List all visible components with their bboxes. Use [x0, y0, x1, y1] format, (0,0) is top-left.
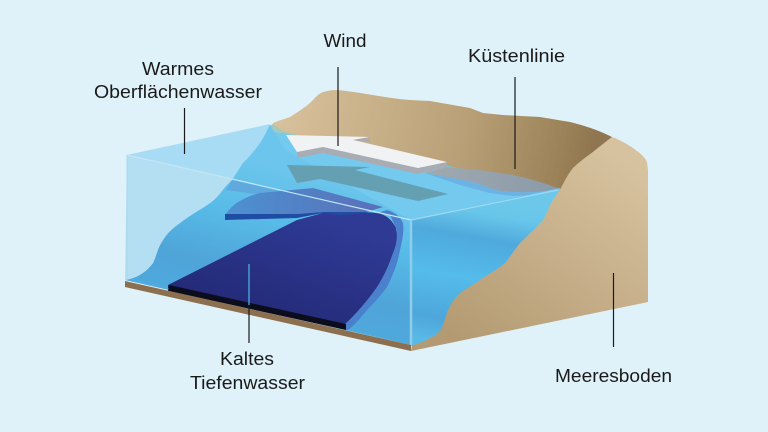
water volume, front right — [411, 188, 580, 346]
label: Wind — [324, 31, 366, 146]
surface front line — [127, 155, 411, 220]
sea surface — [127, 125, 560, 220]
sea floor slab — [125, 281, 411, 351]
leader line — [184, 108, 186, 154]
label text: Warmes — [142, 59, 214, 79]
cold deep water — [168, 188, 403, 330]
deep water black base — [168, 285, 346, 330]
back glass top — [127, 124, 270, 180]
deep water body — [168, 213, 397, 324]
submerged shore — [425, 167, 560, 192]
wind arrow — [286, 135, 447, 174]
corner line — [410, 220, 412, 345]
glass faces — [125, 124, 558, 345]
label: Warmes Oberflächenwasser: Oberflächenwasser — [94, 82, 262, 102]
deep water edge — [345, 210, 403, 330]
label: Küstenlinie: Küstenlinie — [468, 46, 565, 66]
back coastline land — [270, 90, 612, 195]
left glass side — [125, 155, 232, 280]
left edge line — [126, 155, 128, 280]
arrow top — [286, 135, 447, 168]
arrow notch — [353, 137, 370, 142]
label: Kaltes Tiefenwasser: Tiefenwasser — [190, 373, 305, 393]
deep water upper lens — [225, 188, 383, 215]
band on sea surface — [226, 180, 385, 208]
tinted shore corner — [268, 124, 300, 136]
label: Wind: Wind — [324, 31, 366, 51]
label: Meeresboden: Meeresboden — [555, 366, 672, 386]
shore shallows — [425, 173, 560, 196]
illustration: ocean block — [125, 90, 648, 351]
label: Kaltes Tiefenwasser: Kaltes — [220, 349, 274, 369]
arrow side — [286, 135, 447, 174]
front seabed — [411, 137, 648, 351]
label: Kaltes Tiefenwasser — [190, 264, 305, 393]
label: Meeresboden — [555, 273, 672, 386]
lens front edge — [225, 212, 378, 220]
arrow shadow — [287, 165, 448, 201]
label: Küstenlinie — [468, 46, 565, 169]
surface right line — [411, 190, 558, 220]
label: Warmes Oberflächenwasser — [94, 59, 262, 154]
water volume, left side — [125, 125, 411, 345]
